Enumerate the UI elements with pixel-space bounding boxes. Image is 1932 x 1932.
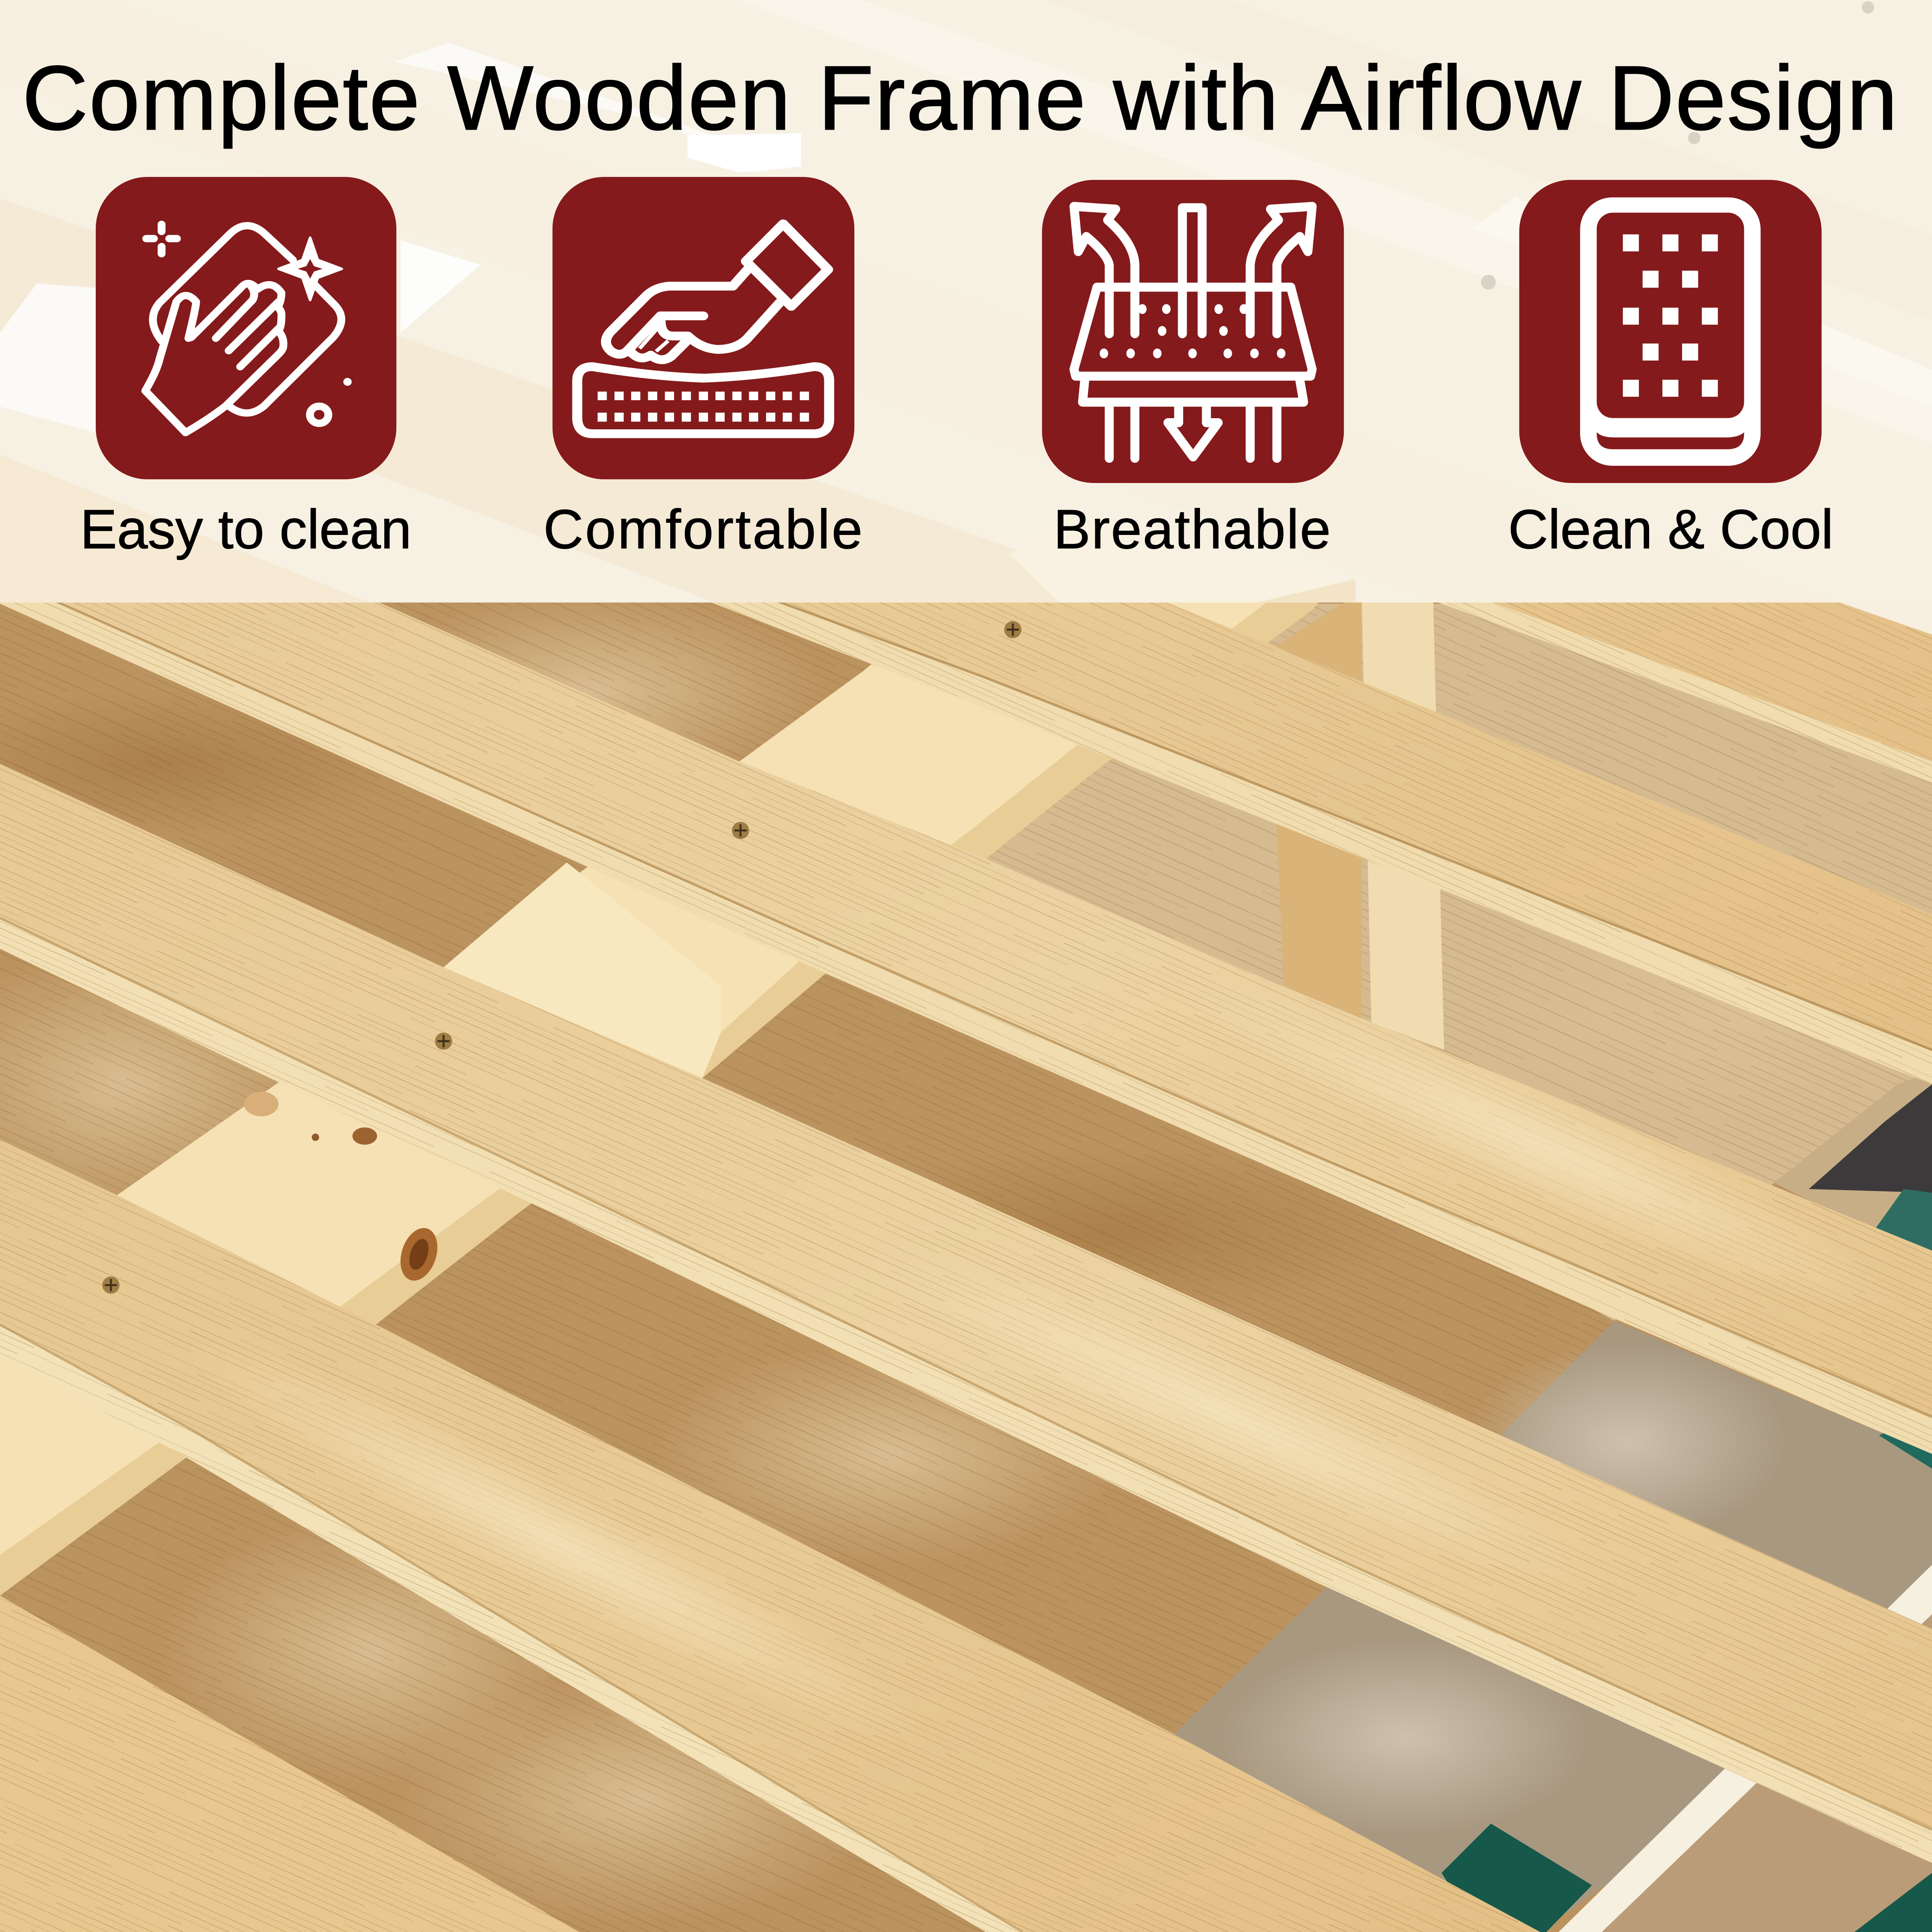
slat C — [0, 455, 1932, 1454]
slat E — [0, 1140, 1540, 1932]
slat A — [0, 0, 1932, 782]
screws — [102, 621, 1021, 1294]
feature: clean and cool — [1508, 180, 1833, 560]
feature: breathable — [1042, 180, 1344, 560]
title: Complete Wooden Frame with Airflow Design — [22, 47, 1898, 149]
translucent header panel — [0, 0, 1932, 635]
floor — [0, 592, 1932, 1932]
icon: airflow through mattress — [1074, 207, 1312, 458]
label: clean and cool: Clean & Cool — [1508, 498, 1833, 560]
icon: mattress — [1580, 197, 1761, 466]
cross beam — [0, 542, 1368, 1596]
label: easy to clean: Easy to clean — [80, 498, 412, 560]
rug — [986, 1072, 1932, 1932]
slat F — [0, 1596, 579, 1932]
tile: comfortable — [553, 177, 854, 479]
slat D — [0, 764, 1932, 1863]
label: breathable: Breathable — [1054, 498, 1331, 560]
wood grain and light on slats — [0, 592, 1932, 1932]
tile: breathable — [1042, 180, 1344, 483]
leg — [1269, 592, 1444, 1050]
tile: easy to clean — [96, 177, 396, 479]
icon: hand pressing foam — [577, 224, 829, 434]
feature: easy to clean — [80, 177, 412, 560]
photo: wooden slat bed frame — [0, 602, 1932, 1932]
label: comfortable: Comfortable — [544, 498, 863, 560]
tile: clean and cool — [1519, 180, 1822, 483]
slat B — [0, 198, 1932, 1084]
icon: hand wiping with cloth — [145, 225, 352, 433]
feature: comfortable — [544, 177, 863, 560]
